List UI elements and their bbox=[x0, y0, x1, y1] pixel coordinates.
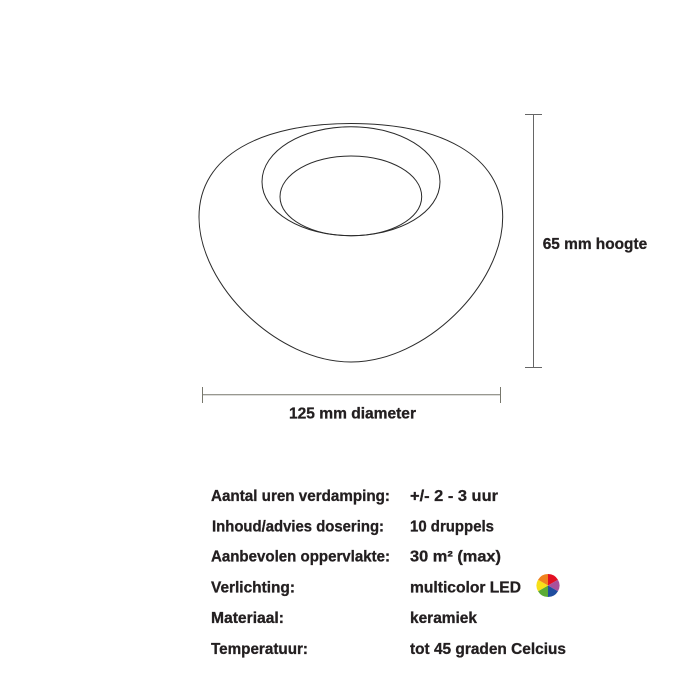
row: lighting bbox=[211, 574, 560, 597]
row: material bbox=[211, 610, 477, 627]
row: evaporation hours: +/- 2 - 3 uur bbox=[410, 488, 498, 505]
icon: colour wheel bbox=[536, 574, 560, 597]
specifications table bbox=[211, 488, 566, 658]
row: material: keramiek bbox=[410, 610, 477, 627]
diameter dimension line bbox=[202, 387, 500, 403]
row: temperature: tot 45 graden Celcius bbox=[410, 641, 566, 658]
row: material: Materiaal: bbox=[211, 610, 284, 627]
row: dosage: 10 druppels bbox=[410, 518, 494, 536]
row: evaporation hours: Aantal uren verdamping: bbox=[211, 488, 390, 505]
height dimension line bbox=[525, 114, 542, 368]
row: recommended area: 30 m² (max) bbox=[410, 548, 501, 566]
outer rim of opening bbox=[262, 127, 440, 236]
diameter label: 125 mm diameter bbox=[289, 406, 416, 422]
row: dosage: Inhoud/advies dosering: bbox=[212, 518, 384, 536]
height label: 65 mm hoogte bbox=[543, 236, 648, 253]
outer body bbox=[199, 124, 503, 362]
row: recommended area bbox=[211, 548, 501, 566]
row: temperature: Temperatuur: bbox=[211, 641, 308, 658]
row: evaporation hours bbox=[211, 488, 498, 505]
row: lighting: multicolor LED bbox=[410, 580, 521, 596]
row: dosage bbox=[212, 518, 494, 536]
row: temperature bbox=[211, 641, 566, 658]
inner rim of opening bbox=[280, 156, 422, 236]
product outline drawing bbox=[199, 124, 503, 362]
row: lighting: Verlichting: bbox=[211, 580, 295, 596]
row: recommended area: Aanbevolen oppervlakte: bbox=[211, 548, 390, 566]
